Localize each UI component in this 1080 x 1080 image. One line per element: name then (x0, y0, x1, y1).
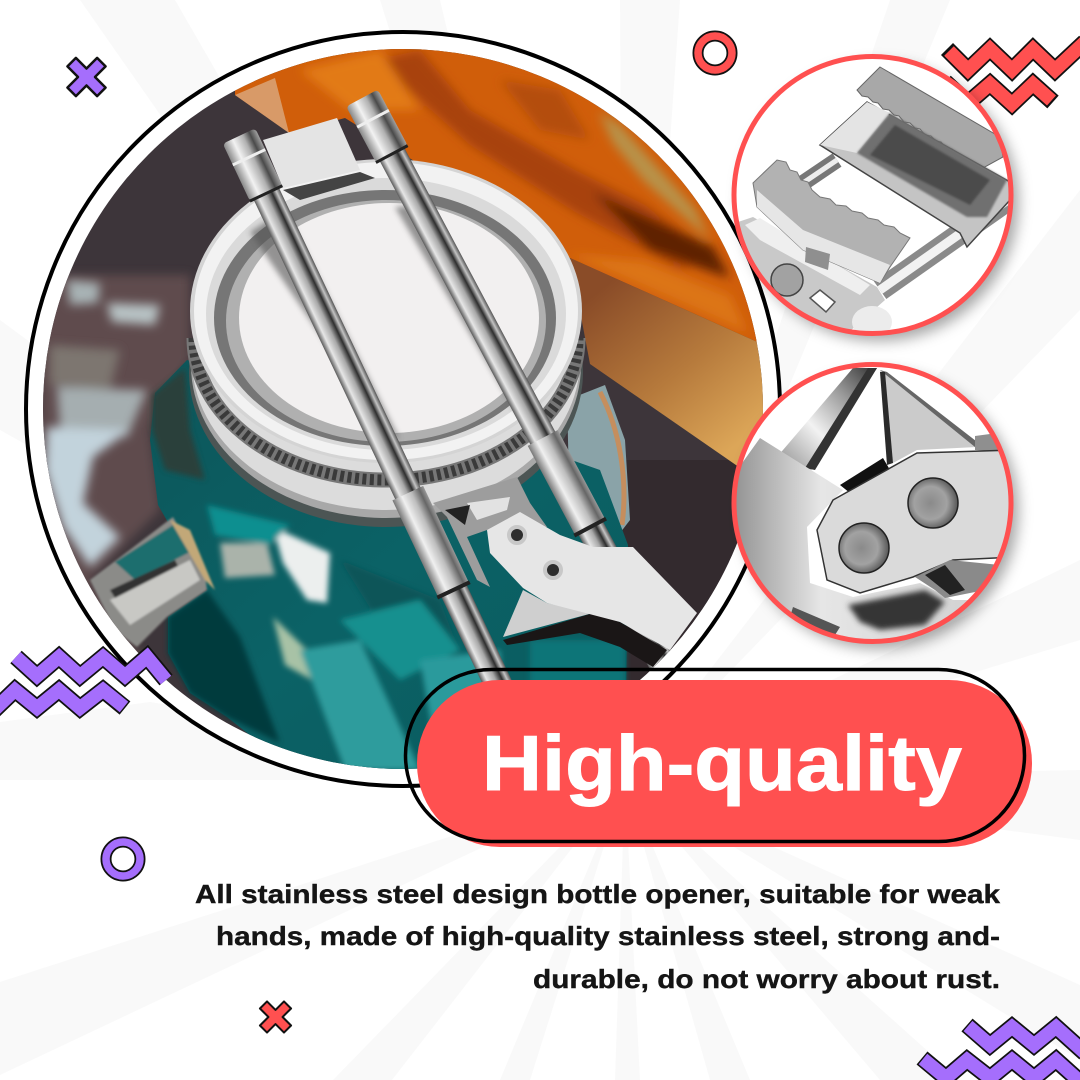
triangular plate (880, 370, 977, 463)
jar lid side (191, 370, 581, 518)
opener arc behind plate (283, 172, 375, 200)
glass jar handle (90, 517, 215, 647)
wood pale corner (235, 78, 289, 133)
rod shadows on lid (250, 205, 530, 440)
clear glass rear edge (568, 385, 630, 530)
lower serrated jaw (753, 160, 910, 283)
opener lower wing (503, 590, 593, 637)
icon: purple cross top left (57, 47, 116, 107)
description text (195, 879, 1001, 994)
opener frame (433, 477, 547, 587)
icon: red ring top (698, 36, 732, 70)
description text: durable, do not worry about rust. (533, 964, 1000, 994)
marble surface patches (45, 280, 160, 567)
rivet and slot (771, 264, 803, 296)
wooden board top face (235, 49, 757, 342)
jar neck dark band under lid (189, 363, 583, 527)
mechanism (915, 560, 1000, 598)
description text: All stainless steel design bottle opener, suitable for weak (195, 879, 1001, 909)
left rod (224, 130, 512, 682)
wooden board side face (570, 258, 763, 466)
icon: purple zigzag left (0, 657, 166, 712)
jar lid top rim (190, 159, 582, 377)
lower rod end (852, 306, 892, 331)
dark tabletop right (622, 460, 738, 680)
description text: hands, made of high-quality stainless steel, strong and- (216, 921, 1000, 951)
tube (777, 368, 877, 472)
jar lid groove (214, 190, 556, 446)
icon: purple zigzag bottom right (922, 1025, 1080, 1080)
main photo ring (26, 32, 780, 786)
opener top plate (263, 118, 360, 188)
upper jaw body (820, 102, 1010, 247)
title pill (406, 670, 1032, 847)
black wedge (840, 458, 890, 493)
right rod (348, 91, 671, 668)
dark shading (848, 590, 945, 630)
main plate (817, 450, 1015, 593)
title text: High-quality (482, 719, 962, 807)
jar lid disc (239, 203, 539, 433)
glass reflections (152, 368, 625, 775)
opener rivets (509, 527, 561, 578)
icon: red zigzag top right (945, 42, 1080, 104)
icon: purple ring (106, 842, 140, 876)
left body (736, 438, 968, 639)
opener handle plate (487, 512, 697, 650)
rivets (908, 478, 958, 528)
rear rods (803, 160, 1015, 290)
close-up circle: jaws (734, 56, 1015, 340)
brown stone tone left (43, 272, 193, 653)
upper serrated plate (857, 67, 1003, 168)
wood grain streaks (300, 50, 747, 333)
main photo: jar with opener (40, 30, 775, 775)
jar lid ridges (194, 338, 578, 480)
teal glass jar body (150, 360, 628, 775)
icon: red cross bottom (251, 993, 300, 1041)
lower body (739, 217, 885, 330)
close-up circle: rivets (730, 364, 1015, 650)
